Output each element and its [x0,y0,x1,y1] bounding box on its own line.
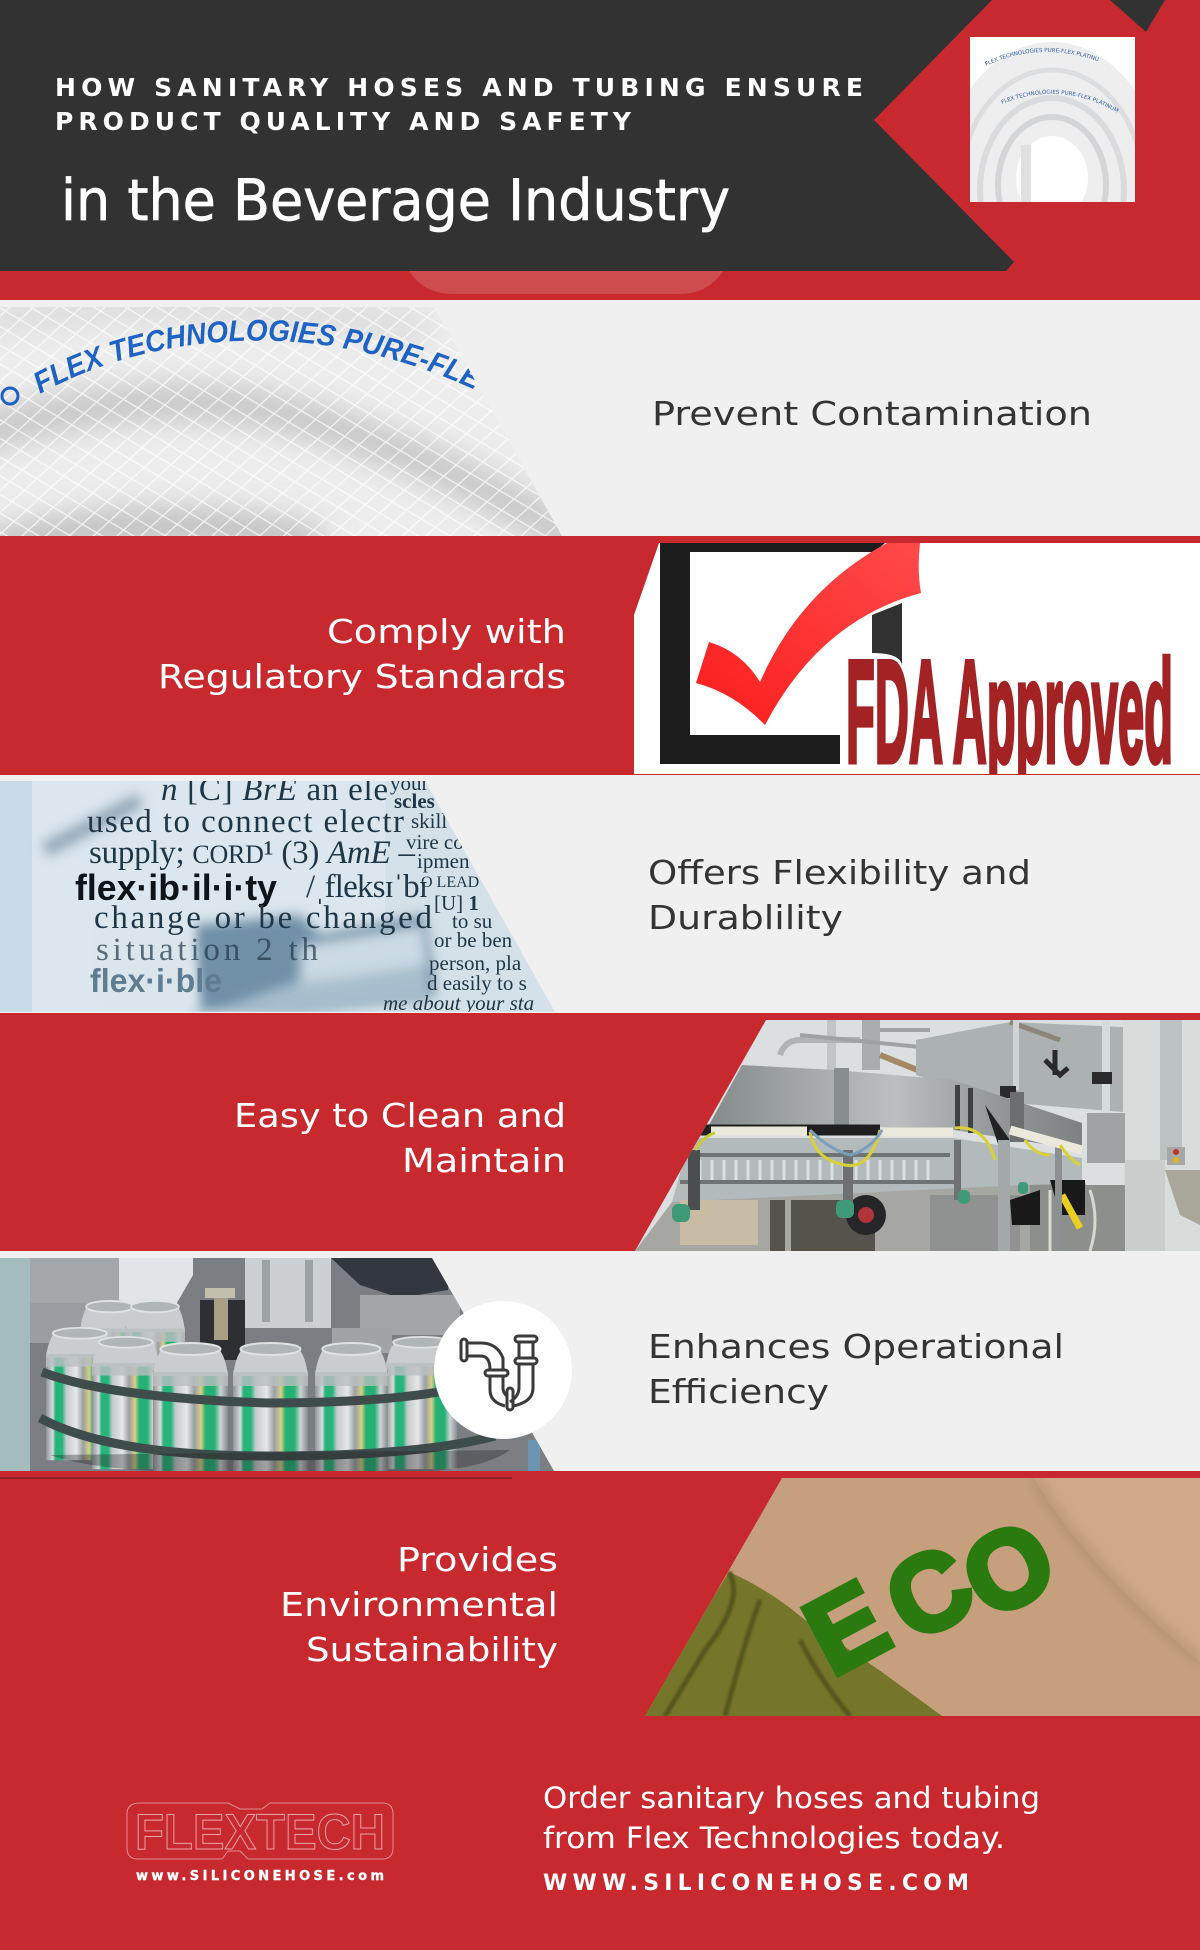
letter E: E [786,1557,906,1698]
photo: dictionary entry flexibility: n [C] BrE an ele [161,772,388,808]
photo: dictionary entry flexibility: situation 2 th [96,932,318,968]
header dark banner [0,0,1014,271]
photo: dictionary entry flexibility: [U] 1 [434,891,479,915]
FDA panel white background [634,543,1200,774]
text: easy to clean and maintain: Easy to Clean and [234,1096,566,1135]
checkbox frame [660,543,885,764]
text: provides environmental sustainability: Provides [397,1540,558,1579]
translucent tab under header [409,271,723,294]
photo: dictionary entry flexibility [0,771,565,1015]
text: comply with regulatory standards: Comply with [327,612,566,651]
photo: dictionary entry flexibility: change or be changed [94,900,432,936]
logo: flextech [127,1803,393,1884]
row 1 background [0,300,1200,536]
footer call to action: WWW.SILICONEHOSE.COM [543,1871,969,1896]
photo: dictionary entry flexibility: scles [394,789,435,813]
photo: coiled sanitary hose: FLEX TECHNOLOGIES PURE-FLEX PLATINUM [1001,90,1119,112]
photo: dictionary entry flexibility: used to connect electr [87,804,404,840]
photo: dictionary entry flexibility: /ˌfleksɪˈbɪ [306,869,428,905]
photo: dictionary entry flexibility: me about your sta [383,991,534,1015]
photo: eco grass lettering on felt [640,1478,1200,1718]
text: comply with regulatory standards [158,612,566,696]
photo: dictionary entry flexibility: vire co [406,830,464,854]
header heading: in the Beverage Industry [61,168,730,234]
photo: dictionary entry flexibility: or be ben [434,928,513,952]
decorative dark triangle top right [1110,0,1165,32]
text: easy to clean and maintain [234,1096,566,1180]
checkbox right stub [872,603,902,665]
photo: dictionary entry flexibility: person, pla [429,951,522,975]
photo: braided hose close-up [0,307,562,536]
icon: plumbing pipe in white circle [434,1301,572,1439]
text: offers flexibility and durability [648,853,1031,937]
row 5 background [0,1251,1200,1471]
text: comply with regulatory standards: Regulatory Standards [158,657,566,696]
photo: dictionary entry flexibility: your [390,771,428,795]
photo: aluminum cans on filling carousel [0,1258,560,1490]
header heading [55,73,863,234]
photo: dictionary entry flexibility: d easily to s [427,971,527,995]
photo: dictionary entry flexibility: flex·i·ble [90,962,222,999]
text: provides environmental sustainability: Sustainability [306,1630,558,1669]
logo: flextech: www.SILICONEHOSE.com [136,1869,384,1884]
header heading: PRODUCT QUALITY AND SAFETY [55,107,632,136]
letter O: O [943,1495,1074,1642]
text: prevent contamination: Prevent Contamination [652,394,1092,433]
photo: dictionary entry flexibility: to su [452,909,493,933]
text: easy to clean and maintain: Maintain [402,1141,566,1180]
letter C: C [866,1521,992,1664]
photo: beverage filling line [630,1020,1200,1252]
text: offers flexibility and durability: Durablility [648,898,843,937]
logo: flextech: FLEXTECH [135,1804,385,1860]
photo: dictionary entry flexibility: ipmen [417,849,470,873]
photo: dictionary entry flexibility: flex·ib·il·i·ty [75,867,277,908]
footer call to action [543,1781,1040,1896]
text: enhances operational efficiency: Enhances Operational [648,1327,1064,1366]
text: enhances operational efficiency: Efficiency [648,1372,829,1411]
photo: dictionary entry flexibility: O LEAD [421,874,479,891]
red check mark [696,543,921,725]
thin strip under cans photo [0,1477,512,1479]
text: offers flexibility and durability: Offers Flexibility and [648,853,1031,892]
photo: dictionary entry flexibility: skill [411,809,447,833]
text: provides environmental sustainability: Environmental [280,1585,558,1624]
text: enhances operational efficiency [648,1327,1064,1411]
image: FDA approved checkbox mark [660,543,1173,793]
photo: dictionary entry flexibility: supply; CORD¹ (3) AmE – [89,835,416,871]
footer call to action: Order sanitary hoses and tubing [543,1781,1040,1815]
photo: coiled sanitary hose [970,37,1135,202]
header heading: HOW SANITARY HOSES AND TUBING ENSURE [55,73,863,102]
text: provides environmental sustainability [280,1540,558,1669]
footer call to action: from Flex Technologies today. [543,1821,1005,1855]
row 3 background [0,775,1200,1013]
